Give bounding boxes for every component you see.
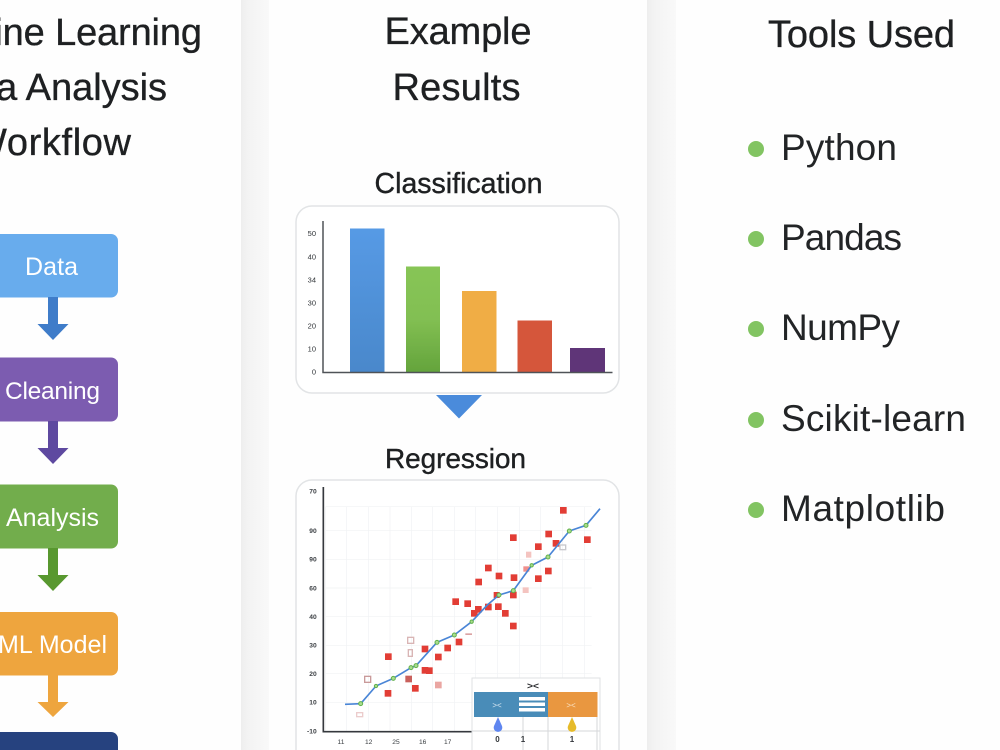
- arrow: Analysis to ML Model: [38, 548, 68, 591]
- y axis labels: 34: [308, 276, 316, 284]
- arrow: ML Model to Results: [38, 675, 68, 717]
- step: ML Model: ML Model: [0, 631, 107, 659]
- step: ML Model: [0, 612, 118, 676]
- y axis labels: 40: [308, 252, 316, 262]
- x axis labels: 11: [338, 739, 345, 746]
- table inset: 1: [570, 735, 575, 744]
- regression line: [345, 509, 600, 704]
- chart: regression scatter: [296, 480, 619, 750]
- bar chart: classification: [296, 206, 619, 393]
- heading: classification: Classification: [374, 168, 542, 200]
- heading: example results: [384, 11, 532, 109]
- heading: workflow title: [0, 12, 202, 164]
- y axis labels: [308, 229, 316, 376]
- step: Results: [0, 732, 118, 750]
- x axis labels: 25: [392, 739, 400, 746]
- y axis labels: [307, 488, 317, 735]
- heading: tools used: Tools Used: [768, 14, 955, 56]
- x axis labels: [338, 739, 452, 746]
- panel: example results: [269, 0, 647, 750]
- table inset: ><: [566, 701, 576, 710]
- y axis labels: 50: [308, 229, 316, 238]
- y axis labels: 70: [309, 488, 317, 495]
- step: Analysis: [0, 484, 118, 548]
- table title: ><: [527, 681, 539, 691]
- heading: regression: Regression: [385, 443, 526, 474]
- list item: Matplotlib: Matplotlib: [781, 488, 945, 529]
- x axis labels: 12: [365, 739, 373, 746]
- red points: [385, 507, 591, 697]
- arrow: Data to Cleaning: [38, 297, 68, 340]
- table inset: 1: [521, 735, 526, 744]
- step: Data: Data: [25, 253, 78, 281]
- line markers: [359, 523, 588, 706]
- y axis labels: 90: [309, 528, 317, 535]
- y axis labels: 30: [309, 643, 317, 650]
- panel: tools used: [676, 0, 1000, 750]
- y axis labels: -10: [307, 728, 317, 735]
- y axis labels: 0: [312, 368, 316, 376]
- list item: Python: Python: [781, 127, 897, 168]
- y axis labels: 90: [309, 557, 317, 564]
- panel: workflow: [0, 0, 241, 750]
- heading: example results: Example: [384, 11, 532, 53]
- heading: example results: Results: [392, 67, 520, 109]
- table inset: ><: [492, 701, 502, 710]
- faint markers: [357, 545, 566, 717]
- y axis labels: 20: [308, 322, 316, 330]
- y axis labels: 60: [309, 585, 317, 592]
- pale points: [435, 552, 531, 688]
- list item: Scikit-learn: Scikit-learn: [781, 398, 966, 439]
- arrow: classification to regression: [436, 395, 482, 418]
- y axis labels: 30: [308, 298, 316, 308]
- y axis labels: 20: [309, 671, 317, 678]
- list item: NumPy: NumPy: [781, 307, 900, 348]
- step: Cleaning: Cleaning: [5, 378, 100, 405]
- y axis labels: 40: [309, 614, 317, 621]
- table inset: [472, 678, 600, 750]
- y axis labels: 10: [309, 700, 317, 707]
- step: Analysis: Analysis: [6, 504, 99, 532]
- step: Cleaning: [0, 358, 118, 422]
- bars: [350, 228, 605, 372]
- arrow: Cleaning to Analysis: [38, 421, 68, 464]
- y axis labels: 10: [308, 344, 316, 354]
- step: Data: [0, 234, 118, 298]
- x axis labels: 17: [444, 739, 452, 746]
- list item: Pandas: Pandas: [781, 217, 902, 258]
- table inset: 0: [495, 735, 500, 744]
- x axis labels: 16: [419, 739, 427, 746]
